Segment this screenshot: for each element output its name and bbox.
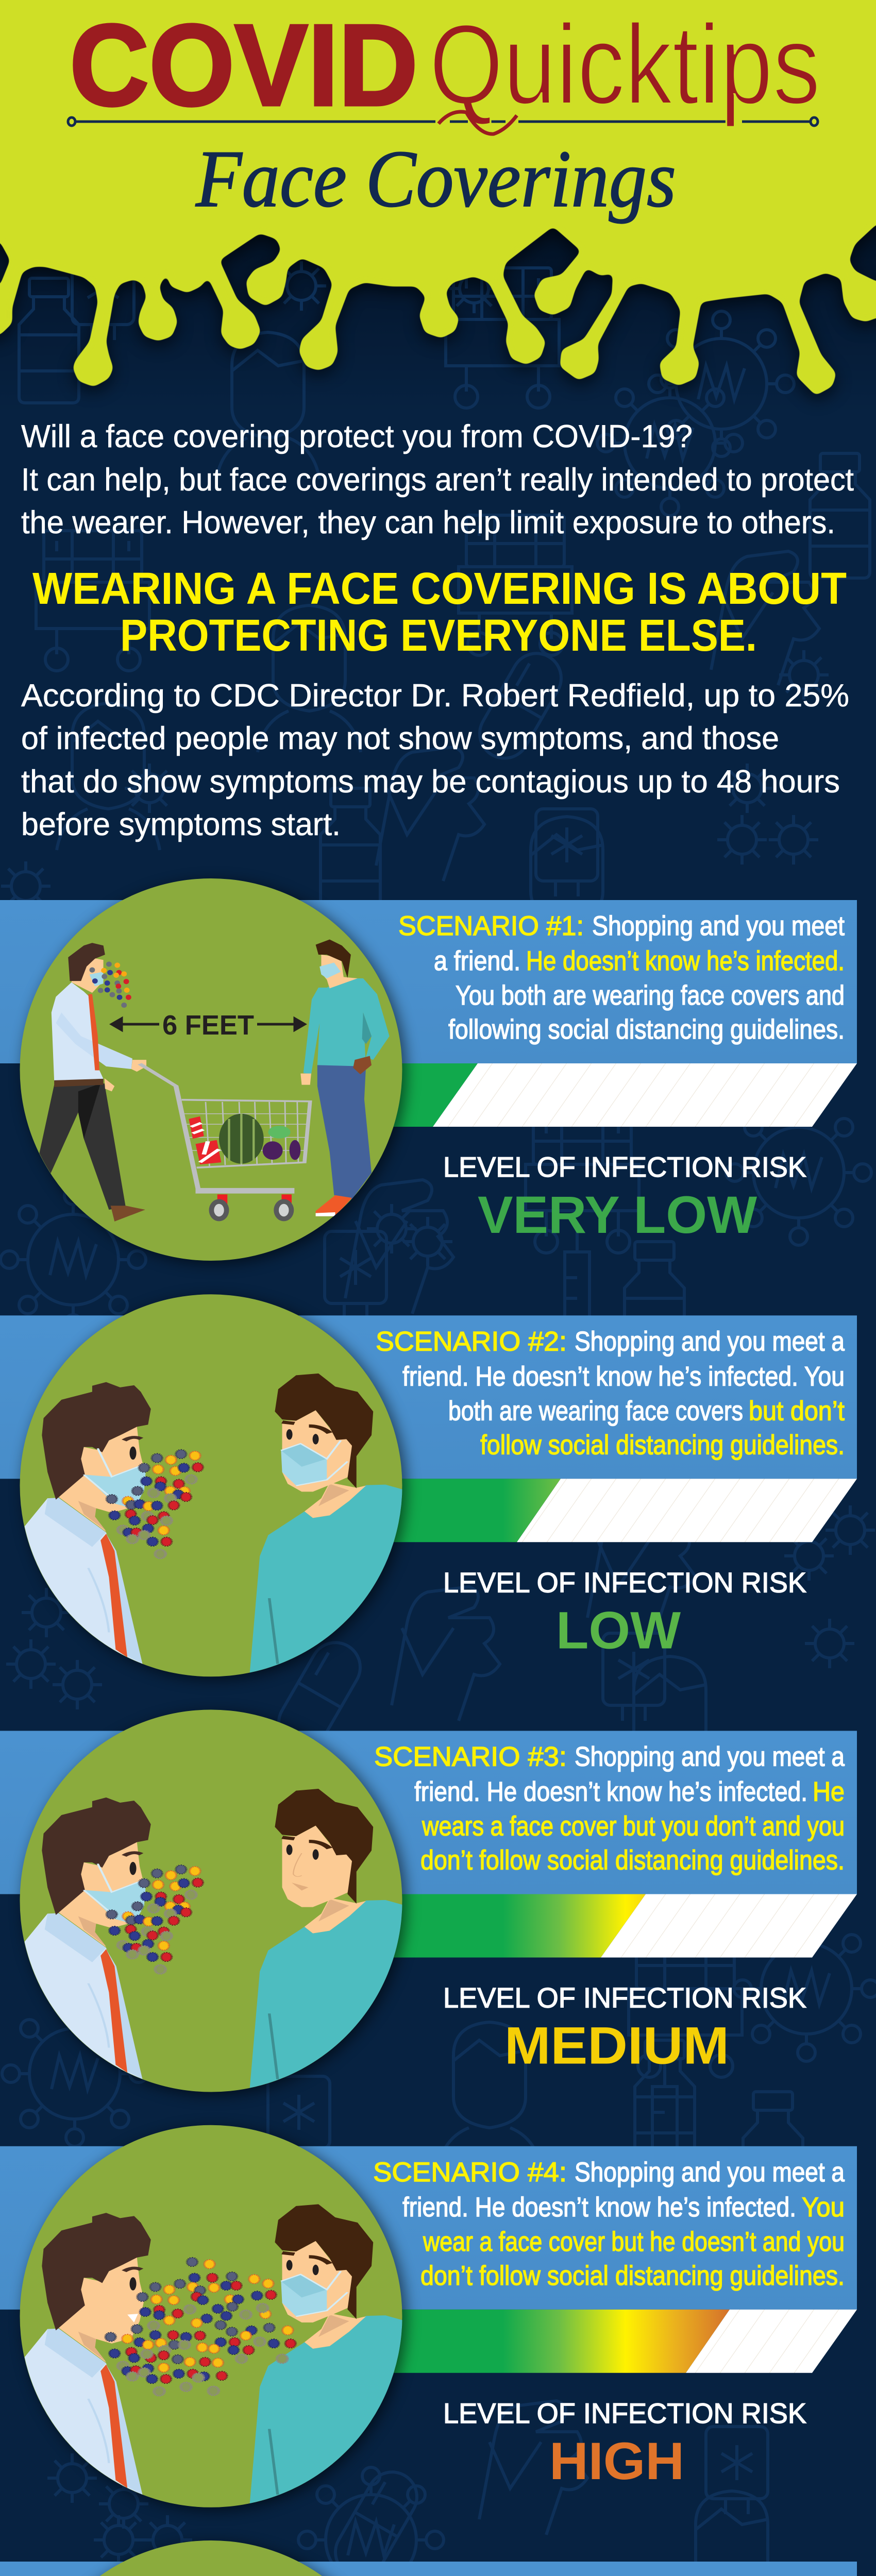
yellow key message heading <box>32 564 847 660</box>
scene circle shadow <box>24 882 406 1264</box>
scene circle <box>20 2125 402 2507</box>
risk meter <box>361 1894 857 1958</box>
illustration: shoppers six feet apart <box>39 939 390 1222</box>
Q swash tail <box>439 112 517 134</box>
title rule <box>68 117 818 126</box>
scene circle shadow <box>24 2128 406 2511</box>
scenario text: SCENARIO #4: <box>373 2157 567 2188</box>
scenario text <box>392 2572 845 2576</box>
scene circle <box>20 1294 402 1676</box>
scenario text: friend. He doesn’t know he’s infected. <box>414 1776 807 1807</box>
risk meter <box>361 1063 857 1127</box>
6 feet label: 6 FEET <box>162 1010 254 1041</box>
scenario band <box>0 1731 857 1894</box>
header slime shadow <box>0 0 876 401</box>
scene circle <box>20 2540 402 2576</box>
scene circle <box>20 878 402 1261</box>
CDC paragraph: before symptoms start. <box>21 807 341 842</box>
intro text block: Will a face covering protect you from COVID-19? <box>21 419 693 454</box>
scenario band <box>0 900 857 1063</box>
illustration: he is masked, you are not <box>24 1789 425 2098</box>
scenario text <box>398 911 845 1045</box>
CDC paragraph: According to CDC Director Dr. Robert Redfield, up to 25% <box>21 678 849 714</box>
risk value: LOW <box>556 1601 681 1659</box>
scenario text: SCENARIO #3: <box>374 1741 567 1772</box>
risk meter <box>361 2310 857 2373</box>
scenario text <box>376 1326 845 1460</box>
scenario text: He <box>813 1776 845 1807</box>
risk label: LEVEL OF INFECTION RISK <box>443 1566 806 1598</box>
scenario text: friend. He doesn’t know he’s infected. <box>402 2192 796 2223</box>
scenario text: You <box>802 2192 845 2223</box>
scene circle <box>20 1709 402 2092</box>
arrow: right <box>257 1019 305 1030</box>
risk label: LEVEL OF INFECTION RISK <box>443 1151 806 1183</box>
scenario text <box>373 2157 845 2291</box>
risk value: MEDIUM <box>504 2016 729 2075</box>
title: COVID: COVID <box>70 0 418 130</box>
scenario text: both are wearing face covers <box>448 1396 743 1426</box>
panel: scenario 4 <box>0 2125 857 2513</box>
scene circle shadow <box>24 1297 406 1680</box>
CDC paragraph: of infected people may not show symptoms, and those <box>21 721 779 756</box>
risk label: LEVEL OF INFECTION RISK <box>443 1981 806 2013</box>
scene circle shadow <box>24 1713 406 2095</box>
panel: scenario 2 <box>0 1294 857 1682</box>
scenario text: Shopping and you meet <box>592 911 845 941</box>
CDC paragraph <box>21 678 849 842</box>
illustration: you are masked, he is not <box>24 2204 425 2513</box>
background: top shading under drips <box>0 196 876 412</box>
yellow key message heading: PROTECTING EVERYONE ELSE. <box>120 611 757 660</box>
risk meter <box>361 1479 857 1542</box>
scenario band <box>0 2146 857 2310</box>
scenario text: but don’t <box>749 1396 845 1426</box>
header lime dripping slime <box>0 0 876 396</box>
scenario text: a friend. <box>434 946 520 976</box>
scenario text: SCENARIO #1: <box>398 911 584 941</box>
risk value: HIGH <box>549 2432 684 2490</box>
scenario text: SCENARIO #2: <box>376 1326 567 1357</box>
intro text block: It can help, but face coverings aren’t really intended to protect <box>21 462 854 498</box>
subtitle: Face Coverings: Face Coverings <box>195 134 676 224</box>
scenario band <box>0 2562 857 2576</box>
yellow key message heading: WEARING A FACE COVERING IS ABOUT <box>32 564 847 614</box>
scenario text <box>374 1741 845 1875</box>
illustration: both masked, close together <box>24 1374 425 1682</box>
arrow: left <box>112 1019 159 1030</box>
CDC paragraph: that do show symptoms may be contagious up to 48 hours <box>21 764 840 800</box>
risk label: LEVEL OF INFECTION RISK <box>443 2397 806 2429</box>
panel: scenario 3 <box>0 1709 857 2098</box>
panel: scenario 5 <box>0 2540 857 2576</box>
intro text block: the wearer. However, they can help limit exposure to others. <box>21 505 835 540</box>
scene circle shadow <box>24 2544 406 2576</box>
title <box>68 0 820 134</box>
panel: scenario 1 <box>0 878 857 1264</box>
intro text block <box>21 419 854 540</box>
risk value: VERY LOW <box>478 1185 757 1244</box>
scenario band <box>0 1315 857 1479</box>
